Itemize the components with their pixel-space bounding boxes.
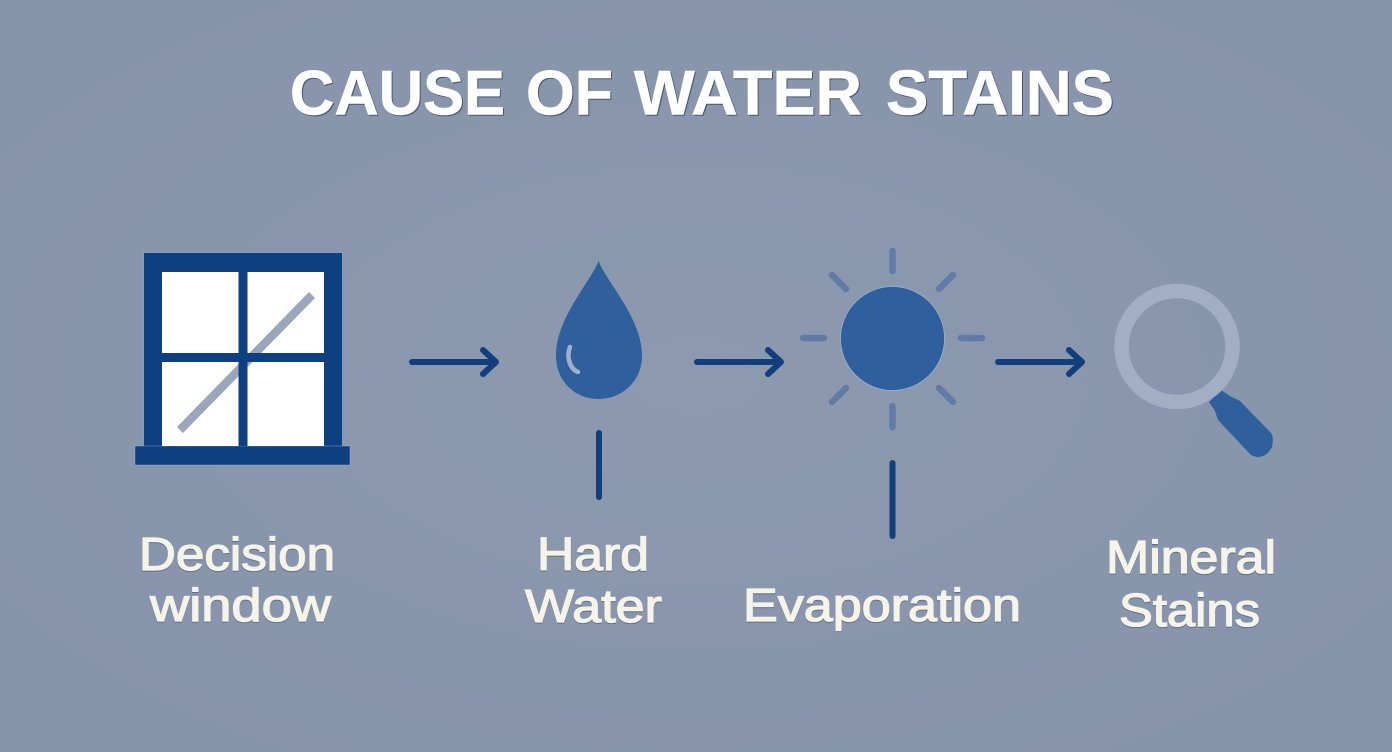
arrow: window to hard water: [412, 350, 496, 374]
label: Hard Water: Hard: [537, 528, 649, 580]
title: STAINS: [886, 58, 1114, 128]
label: Mineral Stains: Mineral: [1106, 531, 1276, 583]
label: Decision window: [139, 528, 335, 631]
connector line: evaporation: [890, 463, 896, 536]
icon: sun: [803, 251, 982, 427]
title: [290, 58, 1114, 128]
connector line: hard water: [596, 433, 602, 497]
label: Evaporation: Evaporation: [743, 579, 1021, 631]
label: Mineral Stains: Stains: [1119, 584, 1260, 636]
title: WATER: [634, 58, 862, 128]
icon: magnifying glass: [1122, 291, 1273, 457]
label: Decision window: Decision: [139, 528, 335, 580]
label: Mineral Stains: [1106, 531, 1276, 636]
title: CAUSE: [290, 58, 505, 128]
label: Hard Water: Water: [525, 580, 662, 632]
icon: window: [135, 252, 350, 465]
icon: water drop: [556, 261, 642, 399]
label: Decision window: window: [149, 579, 332, 631]
title: OF: [526, 58, 613, 128]
label: Hard Water: [525, 528, 662, 632]
arrow: hard water to evaporation: [697, 350, 781, 374]
arrow: evaporation to mineral stains: [998, 350, 1082, 374]
